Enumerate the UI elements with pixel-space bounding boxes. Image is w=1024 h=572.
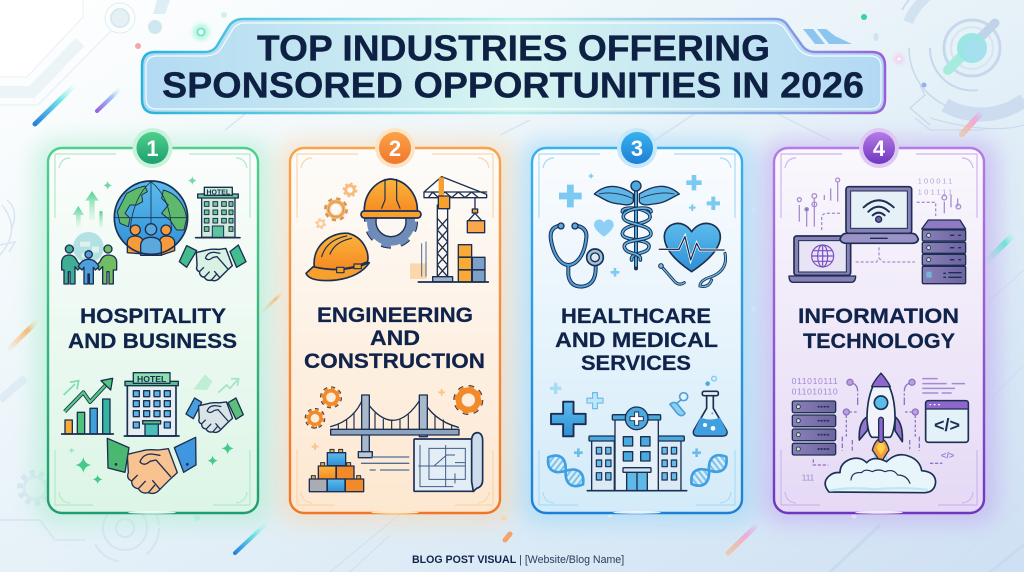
icon: large handshake (107, 437, 196, 493)
icon: bar chart with arrow (62, 378, 113, 434)
icon: left laptop with globe (789, 236, 856, 282)
badge 3: 3 (631, 136, 643, 161)
panel 1 top icons (62, 176, 246, 284)
heading: hospitality and business: AND BUSINESS (68, 329, 237, 353)
icon: blueprint (414, 433, 483, 491)
heading: healthcare and medical services: HEALTHCARE (561, 304, 711, 328)
panel 3 top icons (551, 174, 726, 287)
icon: code window: </> (934, 415, 960, 435)
heading: information technology: TECHNOLOGY (803, 329, 955, 353)
icon: small heart (594, 220, 614, 237)
badge 2 (375, 128, 415, 168)
heading: healthcare and medical services: SERVICES (581, 351, 691, 375)
icon: growth arrows (73, 176, 197, 228)
text: code tag: </> (941, 450, 955, 460)
text: binary code: 011010111 (792, 376, 838, 386)
icon: plus sparkles (312, 389, 445, 450)
text: binary digits: 100011 (918, 176, 952, 185)
icon: code window (926, 401, 968, 442)
text: binary digits: 101111 (918, 187, 952, 196)
panel 4 bottom icons (792, 373, 968, 493)
heading: engineering and construction: ENGINEERING (317, 303, 473, 327)
panel 4 top icons (789, 176, 966, 284)
icon: tower crane (410, 177, 488, 282)
icon: DNA helix right (687, 451, 731, 490)
heading: engineering and construction: AND (370, 326, 420, 350)
icon: plus signs (559, 174, 720, 277)
icon: DNA helix left (543, 451, 588, 491)
decorative code lines (922, 379, 965, 393)
icon: teal handshake (179, 245, 246, 281)
panel 1: hospitality and business (48, 128, 258, 514)
badge 1: 1 (146, 136, 159, 161)
badge 4 (859, 128, 899, 168)
text: binary code: 011010110 (792, 387, 838, 397)
title banner (142, 19, 885, 113)
icon: small gears (316, 184, 356, 228)
icon: hotel building: HOTEL (206, 190, 231, 197)
panel 1 bottom icons (62, 373, 243, 493)
icon: circuit lines and nodes (797, 178, 961, 262)
badge 3 (617, 128, 657, 168)
icon: faded arrows (193, 374, 239, 393)
icon: heart with ECG (659, 223, 726, 286)
icon: main laptop with wifi (840, 187, 918, 243)
icon: hotel (124, 373, 179, 436)
icon: suspension bridge (331, 395, 459, 470)
panel 3: healthcare and medical services (532, 128, 742, 514)
panel 2 bottom icons (307, 387, 483, 492)
icon: hotel: HOTEL (137, 374, 167, 384)
icon: gears (307, 387, 481, 427)
panel 4: information technology (774, 128, 984, 514)
text: binary code: 111 (802, 473, 815, 483)
icon: hard hat with gear (361, 179, 421, 246)
icon: side hard hat (306, 233, 369, 281)
heading: healthcare and medical services: AND MEDICAL (555, 328, 718, 352)
icon: hotel building (196, 187, 240, 238)
badge 4: 4 (873, 136, 886, 161)
icon: hospital building (587, 407, 687, 491)
title text: SPONSORED OPPORTUNITIES IN 2026 (162, 64, 864, 106)
footer credit: BLOG POST VISUAL | [Website/Blog Name] (412, 554, 624, 566)
icon: people with globe (62, 232, 117, 284)
icon: grey handshake (186, 398, 243, 432)
icon: building blocks (309, 449, 364, 492)
heading: information technology: INFORMATION (798, 304, 959, 328)
icon: server stack (792, 401, 836, 455)
icon: globe with people (114, 181, 188, 255)
panel 2 top icons (306, 177, 488, 282)
panel 2: engineering and construction (290, 128, 500, 514)
heading: hospitality and business: HOSPITALITY (80, 304, 226, 328)
icon: stethoscope (551, 223, 603, 287)
panel 3 bottom icons (543, 376, 731, 491)
icon: crosses (550, 383, 701, 457)
badge 1 (132, 128, 172, 168)
icon: molecule (670, 393, 688, 416)
title text: TOP INDUSTRIES OFFERING (257, 28, 770, 68)
icon: circuit connectors (813, 379, 942, 465)
icon: server rack (922, 220, 966, 284)
heading: engineering and construction: CONSTRUCTION (304, 349, 485, 373)
icon: rocket launch cloud (825, 373, 936, 493)
icon: caduceus (594, 181, 679, 268)
badge 2: 2 (389, 136, 401, 161)
icon: sparkles (68, 442, 234, 484)
icon: flask (693, 376, 727, 436)
